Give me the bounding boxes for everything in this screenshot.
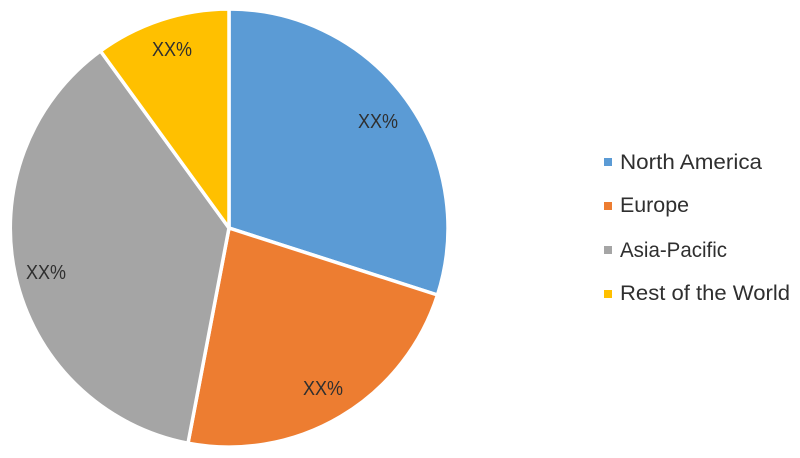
legend item: North America: North America [620, 151, 762, 174]
legend item: Asia-Pacific: Asia-Pacific [620, 239, 727, 262]
label: Rest of the World value: XX% [152, 39, 192, 61]
pie chart [10, 9, 448, 447]
slice: Europe [188, 228, 438, 447]
label: North America value: XX% [358, 111, 398, 133]
label: Asia-Pacific value: XX% [26, 262, 66, 284]
slice: Rest of the World [100, 9, 229, 228]
legend item: Rest of the World: Rest of the World [620, 282, 790, 305]
label: Europe value: XX% [303, 378, 343, 400]
data labels [26, 39, 398, 400]
slice: Asia-Pacific [10, 51, 229, 443]
legend [604, 151, 790, 305]
legend item: Europe: Europe [620, 194, 689, 217]
slice: North America [229, 9, 448, 295]
